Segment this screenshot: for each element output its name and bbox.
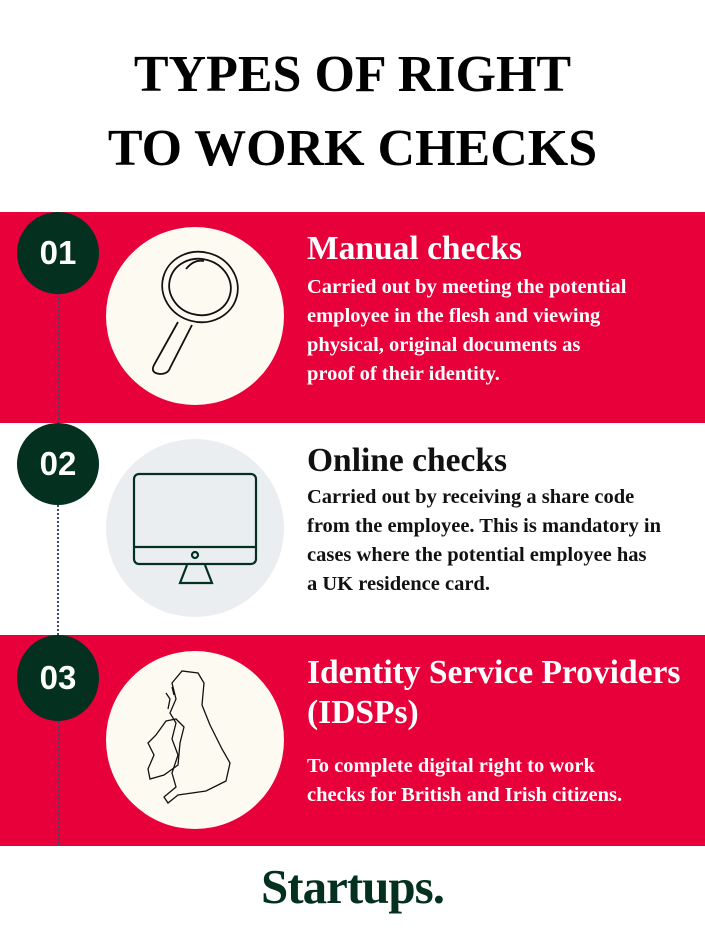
timeline dotted line	[57, 290, 59, 846]
icon: UK map	[106, 651, 284, 829]
text: IDSPs: checks for British and Irish citizens.	[307, 784, 622, 806]
title: TYPES OF RIGHT	[134, 46, 571, 103]
text: online checks	[307, 486, 661, 595]
panel: manual checks	[0, 212, 705, 423]
logo: Startups: Startups.	[261, 859, 444, 914]
text: manual checks	[307, 276, 626, 385]
panel: IDSPs	[0, 635, 705, 846]
icon: magnifying glass	[106, 227, 284, 405]
text: manual checks: physical, original documents as	[307, 334, 580, 356]
title	[108, 46, 597, 177]
number 02	[17, 423, 99, 505]
panel: online checks	[0, 423, 705, 634]
number 01: 01	[40, 234, 76, 271]
text: IDSPs	[307, 755, 622, 806]
text: manual checks: employee in the flesh and viewing	[307, 305, 600, 327]
text: online checks: cases where the potential employee has	[307, 544, 647, 566]
text: online checks: from the employee. This is mandatory in	[307, 515, 661, 537]
title: TO WORK CHECKS	[108, 120, 597, 177]
heading: online checks: Online checks	[307, 442, 507, 479]
text: IDSPs: To complete digital right to work	[307, 755, 595, 777]
number 03	[17, 635, 99, 721]
text: manual checks: proof of their identity.	[307, 363, 500, 385]
number 02: 02	[40, 445, 76, 482]
heading: IDSPs: Identity Service Providers	[307, 654, 680, 691]
text: online checks: a UK residence card.	[307, 573, 490, 595]
heading: IDSPs: (IDSPs)	[307, 694, 419, 731]
icon: monitor	[106, 439, 284, 617]
heading: IDSPs	[307, 654, 680, 731]
text: manual checks: Carried out by meeting the potential	[307, 276, 626, 298]
number 03: 03	[40, 659, 76, 696]
heading: manual checks: Manual checks	[307, 230, 522, 267]
text: online checks: Carried out by receiving a share code	[307, 486, 634, 508]
number 01	[17, 212, 99, 294]
